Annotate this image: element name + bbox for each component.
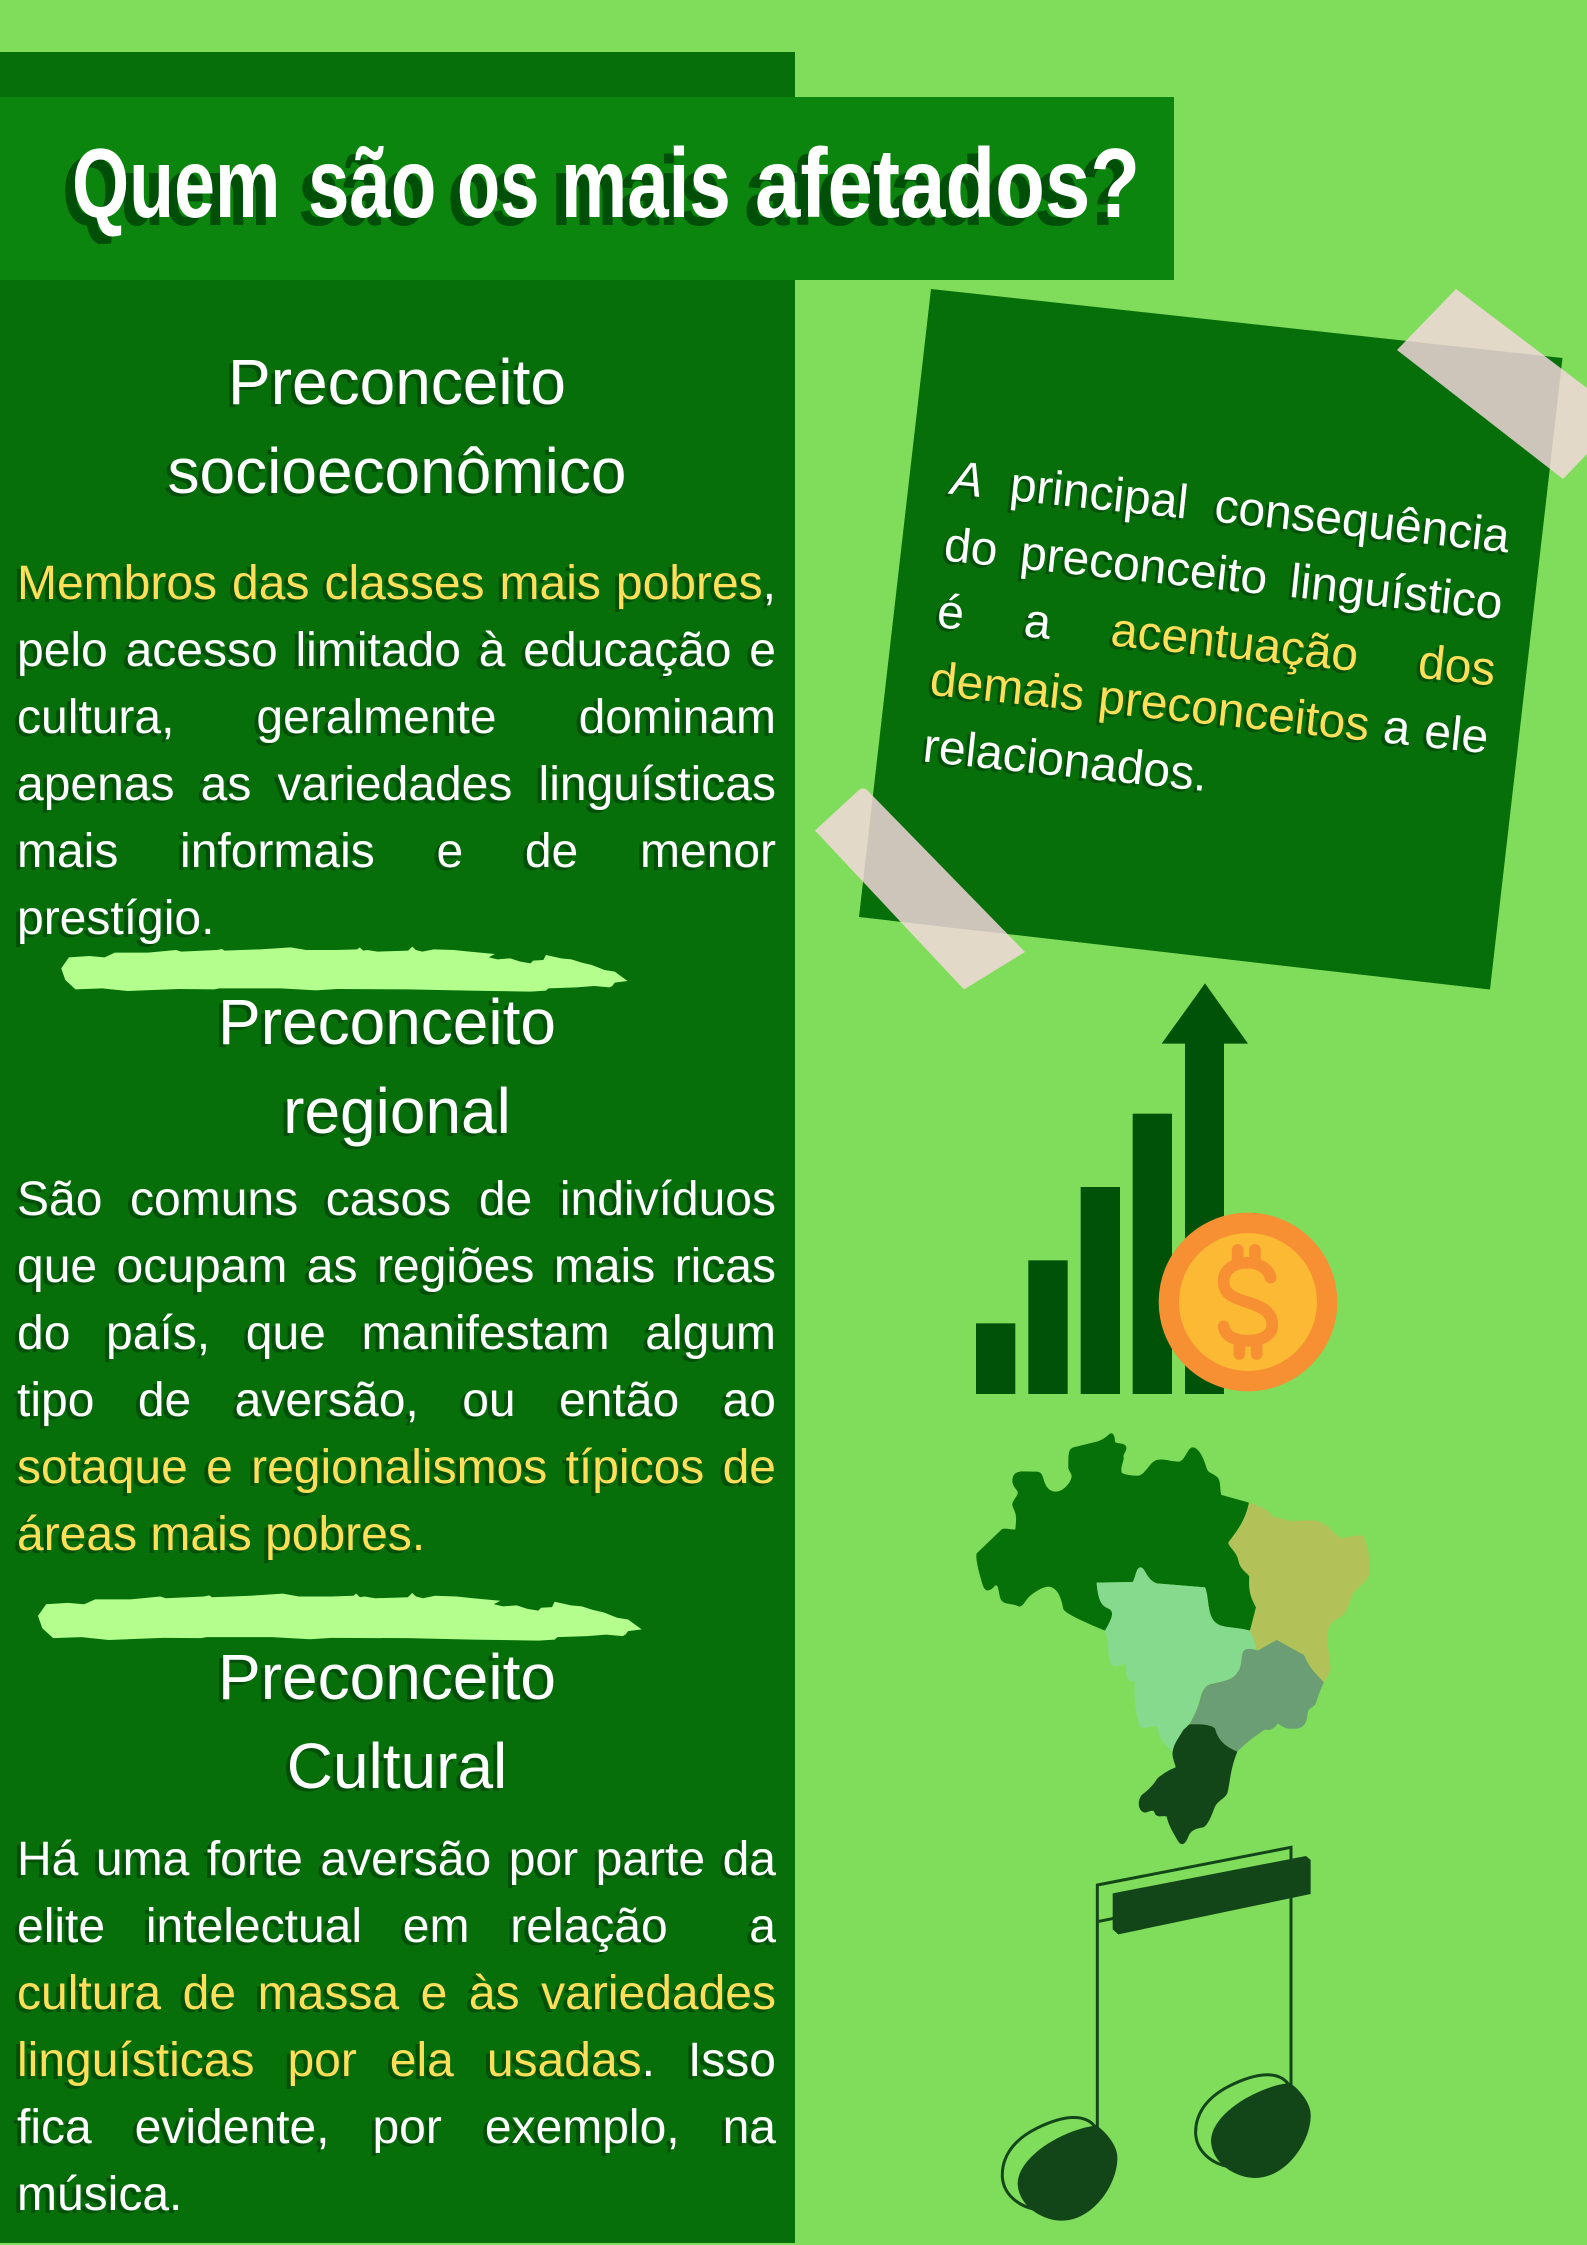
heading line 1: Preconceito	[218, 986, 556, 1058]
title	[65, 128, 1140, 244]
map: north region	[976, 1433, 1256, 1631]
text block: socioeconômico: mais informais e de menor	[17, 824, 776, 878]
heading: preconceito regional	[218, 986, 556, 1150]
heading line 2: regional	[283, 1075, 511, 1147]
text block: socioeconômico: cultura, geralmente dominam	[17, 690, 776, 744]
text block: regional: do país, que manifestam algum	[17, 1306, 776, 1360]
text block: socioeconômico: pelo acesso limitado à educação e	[17, 624, 776, 676]
map: south region	[1139, 1724, 1237, 1844]
map: center-west region	[1097, 1567, 1256, 1752]
heading: preconceito socioeconômico	[166, 346, 626, 507]
sticky note text: relacionados.	[921, 719, 1210, 801]
heading line 1: Preconceito	[218, 1641, 556, 1713]
title: mais	[561, 128, 731, 238]
tape: top right	[1397, 289, 1587, 479]
text block: regional	[14, 1172, 776, 1563]
title: afetados?	[755, 128, 1140, 238]
title: são	[308, 128, 436, 238]
heading: preconceito socioeconômico: Preconceito	[228, 346, 566, 418]
map: northeast region	[1228, 1503, 1370, 1682]
title: Quem	[72, 128, 280, 238]
icon: music notes	[1002, 1847, 1311, 2221]
text block: socioeconômico	[15, 556, 776, 947]
text block: cultural: fica evidente, por exemplo, na	[17, 2100, 776, 2154]
sticky note panel	[859, 289, 1562, 990]
icon: dollar coin	[1159, 1213, 1337, 1391]
text block: regional: sotaque e regionalismos típicos de	[17, 1440, 776, 1494]
text block: cultural	[14, 1832, 776, 2220]
heading: preconceito cultural	[218, 1641, 556, 1802]
brush stroke 2	[38, 1593, 642, 1641]
sticky note text: é a acentuação dos	[935, 585, 1498, 696]
heading: preconceito socioeconômico: socioeconômico	[168, 435, 626, 507]
text block: regional: que ocupam as regiões mais ricas	[17, 1240, 776, 1292]
text block: cultural: Há uma forte aversão por parte da	[17, 1832, 776, 1886]
text block: cultural: música.	[17, 2168, 182, 2220]
tape: bottom left	[815, 788, 1025, 990]
map of Brazil	[976, 1433, 1370, 1844]
heading line 2: Cultural	[287, 1730, 507, 1802]
bar chart with arrow	[976, 983, 1248, 1394]
map: southeast region	[1189, 1640, 1324, 1752]
sticky note text: demais preconceitos a ele	[928, 652, 1491, 763]
title banner	[0, 97, 1174, 280]
sticky note text: A principal consequência	[949, 451, 1512, 563]
sticky note text	[921, 451, 1512, 801]
text block: socioeconômico: prestígio.	[17, 892, 214, 944]
text block: socioeconômico: apenas as variedades linguísticas	[17, 758, 776, 810]
text block: regional: tipo de aversão, ou então ao	[17, 1374, 776, 1426]
brush stroke 1	[61, 947, 628, 992]
text block: cultural: linguísticas por ela usadas. Isso	[17, 2034, 776, 2086]
text block: regional: áreas mais pobres.	[17, 1508, 425, 1560]
text block: socioeconômico: Membros das classes mais pobres,	[17, 556, 776, 610]
left panel	[0, 52, 795, 2243]
text block: cultural: elite intelectual em relação a	[17, 1900, 776, 1952]
title: os	[457, 128, 539, 238]
text block: cultural: cultura de massa e às variedades	[17, 1966, 776, 2020]
text block: regional: São comuns casos de indivíduos	[17, 1172, 776, 1226]
sticky note text: do preconceito linguístico	[942, 518, 1505, 630]
